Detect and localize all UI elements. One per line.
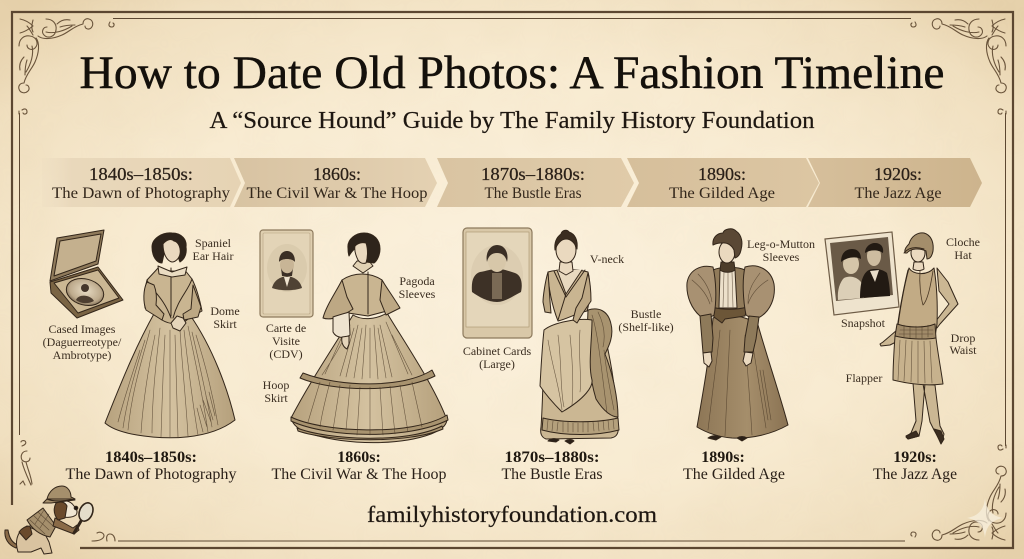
labels: 1870s: V-neck <box>590 252 624 266</box>
labels: 1860s: (CDV) <box>269 347 303 361</box>
figure: carte de visite card <box>260 230 313 317</box>
caption: 1890s: The Gilded Age <box>683 466 785 483</box>
chevron: 1890s: The Gilded Age <box>669 185 775 202</box>
labels: 1840s: Ear Hair <box>193 249 233 263</box>
caption: 1870s-1880s: The Bustle Eras <box>502 466 602 483</box>
labels: 1920s: Drop <box>951 331 975 345</box>
figure: cabinet card <box>463 228 532 338</box>
chevron: 1840s-1850s: The Dawn of Photography <box>52 185 230 202</box>
chevron: 1860s: 1860s: <box>313 164 361 184</box>
caption: 1920s: 1920s: <box>893 449 937 466</box>
labels: 1920s <box>841 235 980 385</box>
labels: 1920s: Snapshot <box>841 316 886 330</box>
labels: 1840s: Ambrotype) <box>53 348 111 362</box>
labels: 1920s: Cloche <box>946 235 980 249</box>
labels: 1840s: Dome <box>210 304 240 318</box>
labels: 1870s: Bustle <box>631 307 661 321</box>
chevron: 1840s-1850s <box>42 158 241 207</box>
chevron: 1890s: 1890s: <box>698 164 746 184</box>
chevron: 1920s <box>808 158 982 207</box>
labels: 1870s <box>463 252 674 371</box>
labels: 1860s: Skirt <box>264 391 288 405</box>
labels: 1920s: Waist <box>949 343 977 357</box>
labels: 1860s: Hoop <box>263 378 289 392</box>
labels: 1870s: (Shelf-like) <box>618 320 674 334</box>
caption: 1860s: 1860s: <box>337 449 381 466</box>
labels: 1860s: Pagoda <box>399 274 435 288</box>
caption: 1890s: 1890s: <box>701 449 745 466</box>
chevron: 1870s-1880s <box>437 158 634 207</box>
chevron: 1860s <box>234 158 437 207</box>
labels: 1840s: Skirt <box>213 317 237 331</box>
labels: 1840s: (Daguerreotype/ <box>43 335 122 349</box>
figure: 1840s dress <box>105 233 235 438</box>
title: How to Date Old Photos: A Fashion Timeline <box>80 47 945 99</box>
caption: 1840s-1850s: The Dawn of Photography <box>66 466 236 483</box>
labels: 1860s: Visite <box>272 334 300 348</box>
caption: 1870s-1880s: 1870s–1880s: <box>504 449 600 466</box>
labels: 1860s <box>263 274 436 405</box>
caption: 1840s-1850s <box>66 449 236 483</box>
caption: 1860s: The Civil War & The Hoop <box>272 466 446 483</box>
labels: 1890s: Leg-o-Mutton <box>747 237 815 251</box>
figure: 1860s dress <box>291 233 448 443</box>
figure: 1870s dress <box>540 230 619 444</box>
figure: snapshot <box>825 232 899 315</box>
caption: 1920s <box>873 449 957 483</box>
labels: 1890s: Sleeves <box>763 250 800 264</box>
labels: 1840s: Spaniel <box>195 236 232 250</box>
chevron: 1870s-1880s: The Bustle Eras <box>484 185 582 202</box>
icon: cased image <box>50 230 123 318</box>
chevron: 1840s-1850s: 1840s–1850s: <box>89 164 193 184</box>
labels: 1860s: Sleeves <box>399 287 436 301</box>
icon: source hound dog <box>5 486 96 554</box>
subtitle: A “Source Hound” Guide by The Family History Foundation <box>210 108 814 134</box>
labels: 1840s: Cased Images <box>49 322 116 336</box>
labels: 1890s <box>747 237 815 264</box>
website url: familyhistoryfoundation.com <box>367 502 657 527</box>
decorative sparkle <box>967 498 1003 538</box>
chevron: 1890s <box>627 158 819 207</box>
labels: 1870s: Cabinet Cards <box>463 344 531 358</box>
figure: 1920s dress <box>880 233 958 444</box>
caption: 1890s <box>683 449 785 483</box>
caption: 1840s-1850s: 1840s–1850s: <box>105 449 197 466</box>
timeline chevrons <box>42 158 982 207</box>
caption: 1870s-1880s <box>502 449 602 483</box>
labels: 1840s <box>43 236 240 362</box>
figure: 1890s dress <box>687 229 788 441</box>
chevron: 1920s: 1920s: <box>874 164 922 184</box>
chevron: 1920s: The Jazz Age <box>854 185 942 202</box>
labels: 1860s: Carte de <box>266 321 306 335</box>
caption: 1860s <box>272 449 446 483</box>
era captions <box>66 449 957 483</box>
chevron: 1860s: The Civil War & The Hoop <box>246 185 428 202</box>
chevron: 1870s-1880s: 1870s–1880s: <box>481 164 585 184</box>
caption: 1920s: The Jazz Age <box>873 466 957 483</box>
labels: 1870s: (Large) <box>479 357 515 371</box>
labels: 1920s: Hat <box>954 248 972 262</box>
labels: 1920s: Flapper <box>846 371 882 385</box>
